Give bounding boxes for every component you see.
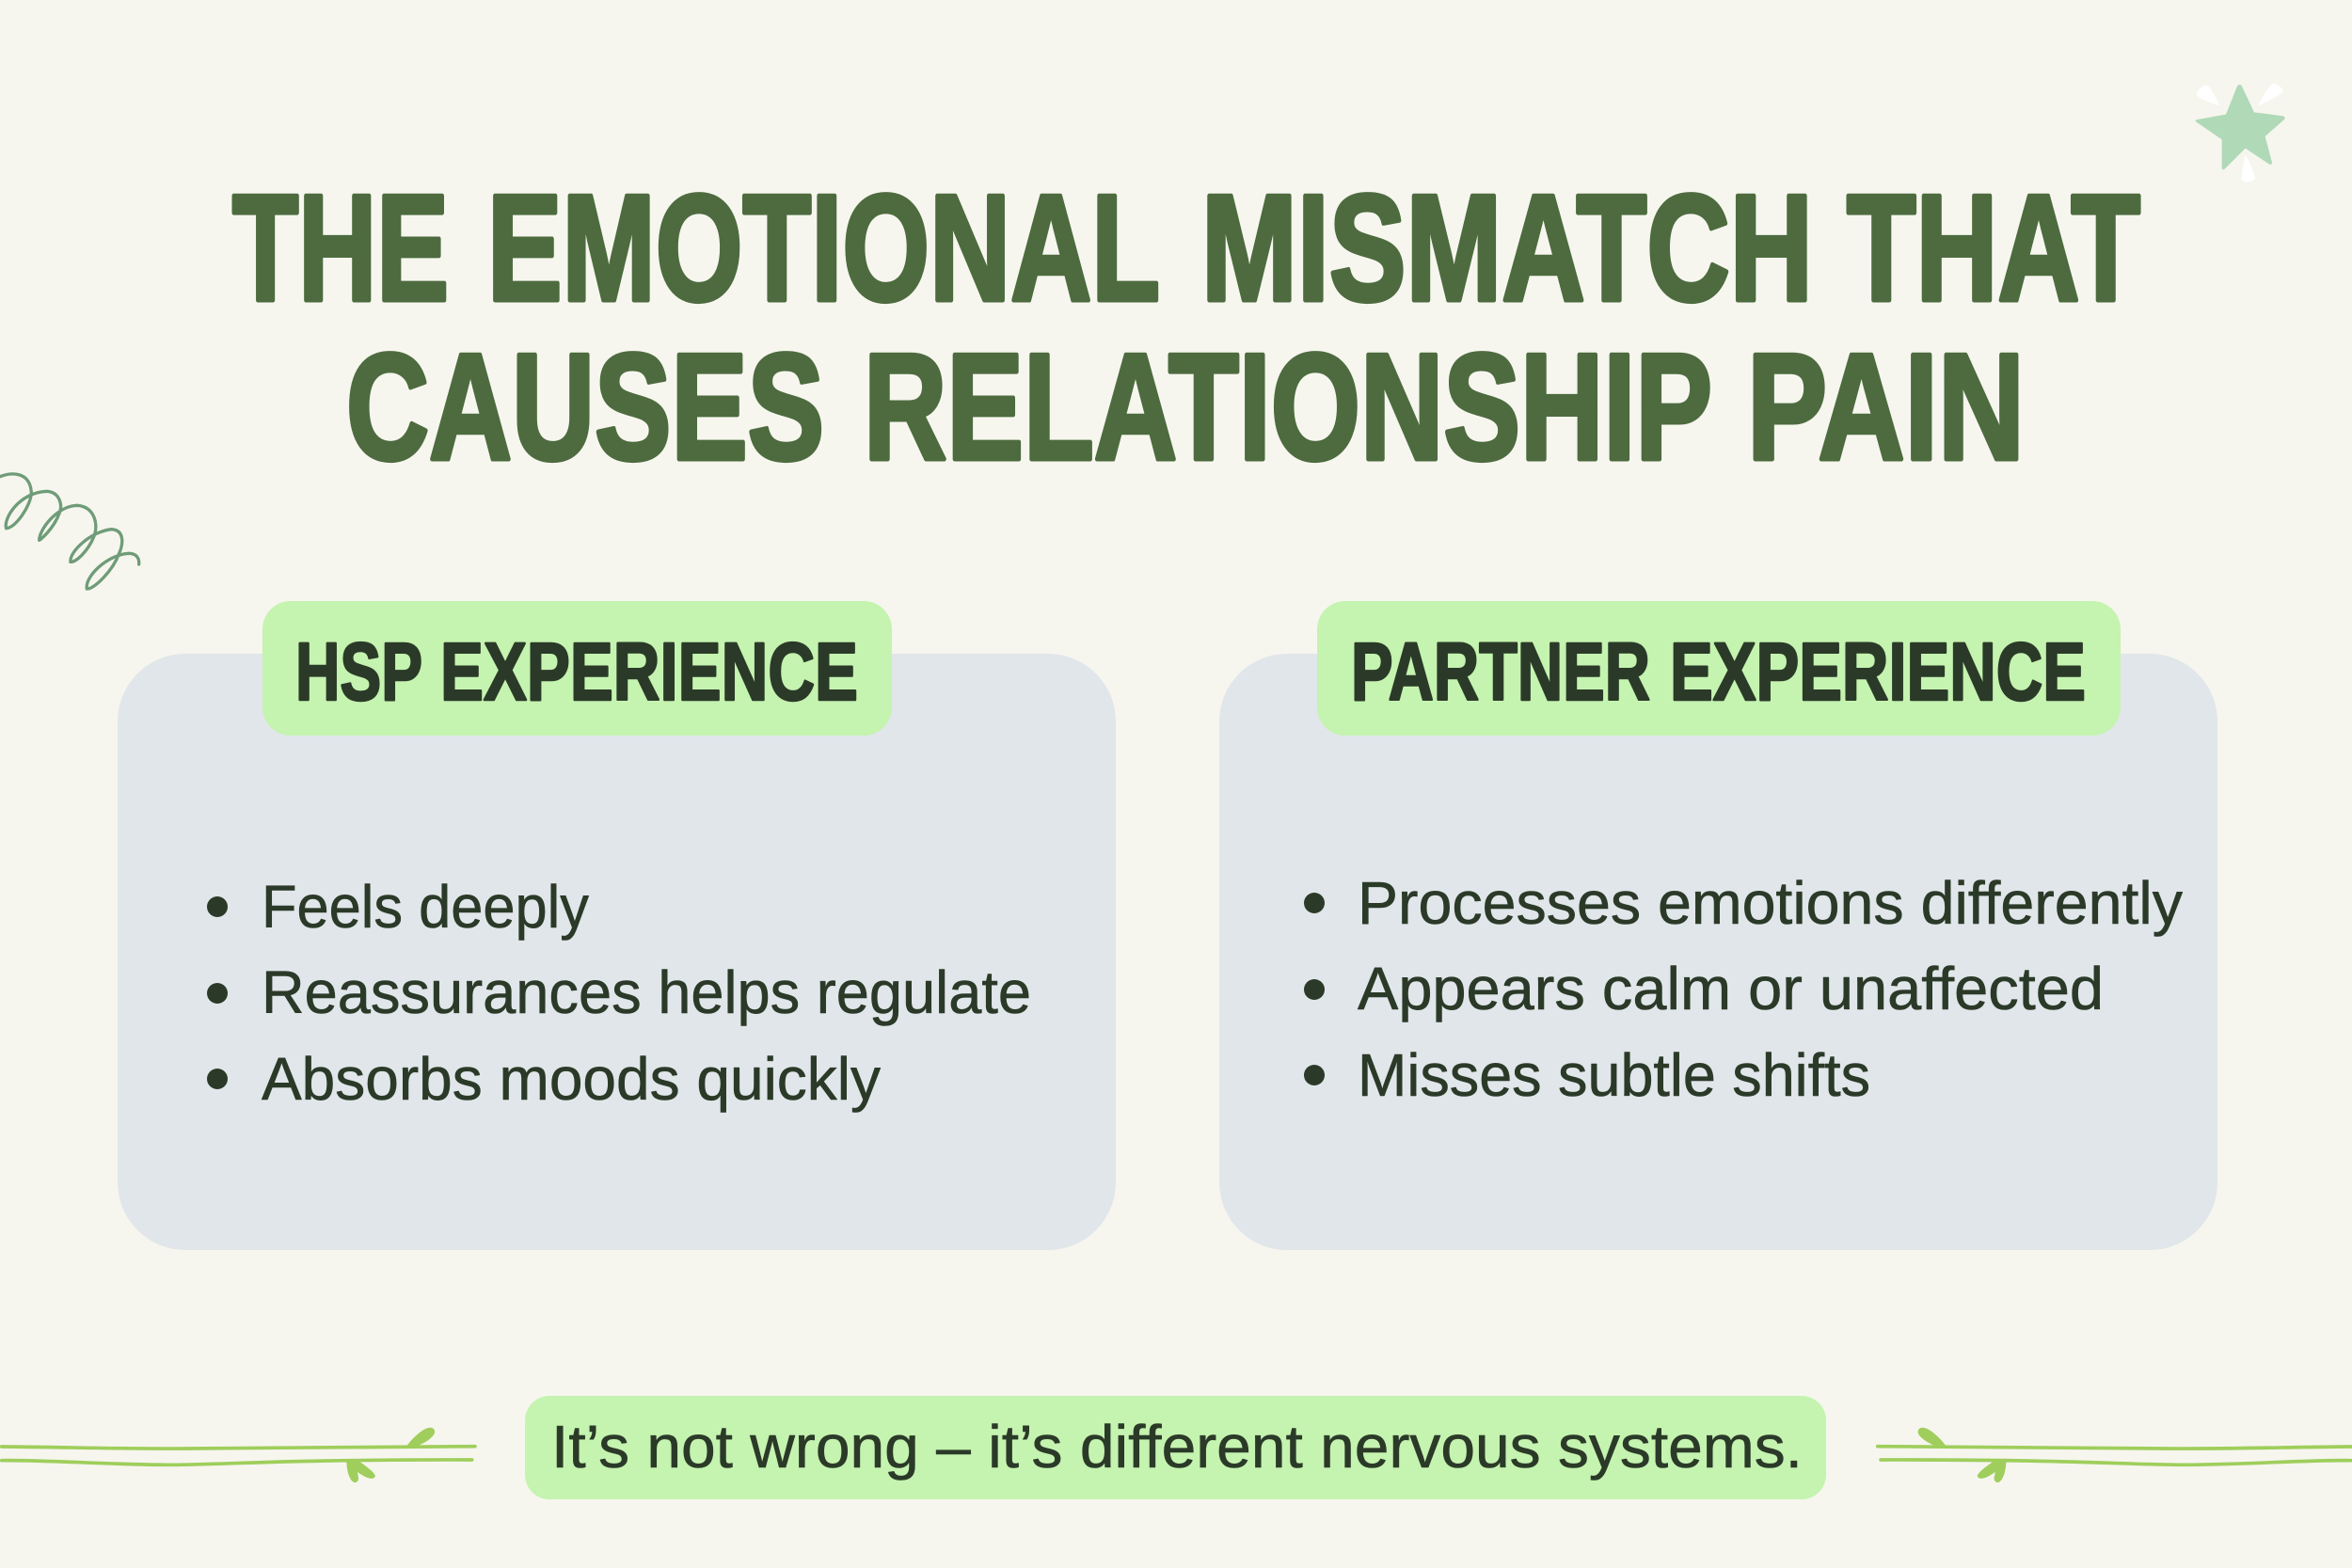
list: HSP experience points [207,873,1031,1113]
callout: closing message: It’s not wrong – it’s different nervous systems. [551,1413,1803,1481]
title: CAUSES [346,323,824,492]
list: HSP experience points: Absorbs moods quickly [262,1045,881,1113]
list: HSP experience points: Reassurances helps regulate [262,958,1031,1026]
vine: right [1878,1428,2351,1482]
list: partner experience points: Appears calm or unaffected [1358,955,2104,1022]
title: THE [232,164,449,333]
list: HSP experience points: Feels deeply [262,873,589,941]
title: EMOTIONAL [487,164,1160,333]
list: partner experience points: Processes emotions differently [1358,869,2183,937]
panel: partner experience [1219,601,2217,1250]
title: MISMATCH [1201,164,1813,333]
heading tab: partner experience: EXPERIENCE [1670,626,2086,718]
panel: HSP experience [118,601,1116,1250]
list: partner experience points: Misses subtle shifts [1358,1041,1870,1109]
icon: spiral squiggle [0,474,139,589]
heading tab: HSP experience [262,601,892,736]
list: partner experience points [1304,869,2183,1109]
title: PAIN [1747,323,2025,492]
heading tab: HSP experience: HSP [295,626,422,718]
title [232,164,2140,492]
vine: left [2,1428,475,1482]
title: THAT [1847,164,2140,333]
heading tab: HSP experience: EXPERIENCE [440,626,858,718]
title: RELATIONSHIP [864,323,1712,492]
icon: star with sparkles [2196,83,2285,182]
callout: closing message [525,1396,1826,1499]
heading tab: partner experience: PARTNER [1351,626,1650,718]
heading tab: partner experience [1317,601,2121,736]
